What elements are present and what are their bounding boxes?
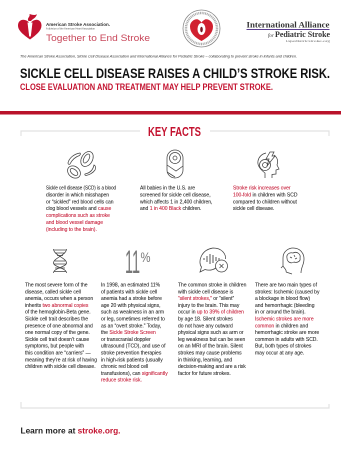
text block: sickle cell anemia: this condition are “carriers” — [25,350,91,356]
text block: stroke risk: sickle cell disease. [233,206,274,212]
text block: 1998 estimate: in high-risk patients (usually [101,357,163,363]
text block: silent strokes: “silent strokes,” or “silent” [178,296,234,302]
text block: newborn screening: and 1 in 400 Black children. [140,206,201,212]
text block: 1998 estimate: the Sickle Stroke Screen [101,330,156,336]
icon: blood cells [65,149,96,181]
text block: sickle cell anemia: presence of one abnormal and [25,323,93,329]
text: Together to End Stroke: Together to End Stroke [46,33,150,44]
text block: sickle cell anemia: symptoms, but people with [25,344,84,350]
stat: 11 percent: 11 [125,244,140,280]
collaboration statement: The American Stroke Association, Sickle Cell Disease Association and International Alliance for Pediatric Stroke – collaborating to prevent stroke in infants and children. [20,54,297,58]
text: division line: A division of the American Heart Association [46,28,96,30]
text block: 1998 estimate: such as weakness in an arm [101,310,164,316]
call to action: learn more: Learn more at stroke.org. [20,426,120,436]
text block: what is SCD: complications such as stroke [46,213,110,219]
text block: 1998 estimate: reduce stroke risk. [101,378,142,384]
icon: speech bubble with x [200,248,228,272]
text block: silent strokes: The common stroke in children [178,282,247,288]
text block: types of strokes: common in children and [255,323,308,329]
text block: silent strokes: physical signs such as arm or [178,330,244,336]
text block: sickle cell anemia: meaning they’re at risk of having [25,357,97,363]
subtitle: CLOSE EVALUATION AND TREATMENT MAY HELP PREVENT STROKE. [20,82,273,93]
text block: silent strokes: by age 18. Silent strokes [178,316,233,322]
stat: 11 percent: % [140,249,150,265]
text block: silent strokes: on an MRI of the brain. Silent [178,344,243,350]
text block: types of strokes: common in adults with SCD. [255,337,318,343]
text block: sickle cell anemia: Sickle cell trait describes the [25,316,88,322]
panel: key facts frame [21,131,329,408]
text block: 1998 estimate: as an “overt stroke.” Today, [101,323,161,329]
text block: silent strokes: injury to the brain. This may [178,303,240,309]
logo: International Alliance for Pediatric Stroke [246,20,331,43]
logo: American Stroke Association [18,14,150,44]
text block: stroke risk: 100-fold in children with SCD [233,192,297,198]
text block: sickle cell anemia: inherits two abnormal copies [25,303,88,309]
icon: head with lightning bolt [258,152,279,178]
text block: 1998 estimate: transfusions), can significantly [101,371,168,377]
text: for Pediatric Stroke: for Pediatric Stroke [268,30,330,39]
text block: what is SCD: (including to the brain). [46,227,97,233]
text block: sickle cell anemia: children with sickle cell disease. [25,364,96,370]
text block: silent strokes: do not have any outward [178,323,233,329]
logo: Sickle Cell Disease Association [183,10,220,47]
text: International Alliance: International Alliance [246,20,330,30]
text block: 1998 estimate: or leg, sometimes referred to [101,316,165,322]
text: American Stroke Association: American Stroke Association. [46,22,110,28]
text block: 1998 estimate: chronic red blood cell [101,364,148,370]
icon: head with brain [281,248,304,274]
icon: DNA helix [54,249,66,273]
text block: types of strokes: a blockage in blood flow) [255,296,310,302]
text block: newborn screening: All babies in the U.S. are [140,186,195,192]
text block: 1998 estimate: or transcranial doppler [101,337,151,343]
text block: types of strokes: But, both types of strokes [255,344,312,350]
text block: 1998 estimate: anemia had a stroke before [101,296,162,302]
text block: sickle cell anemia: Sickle cell trait doesn’t cause [25,337,89,343]
text block: what is SCD: Sickle cell disease (SCD) is a blood [46,186,116,192]
icon: heart and torch [18,14,42,40]
text block: types of strokes: may occur at any age. [255,350,304,356]
text block: sickle cell anemia: disease, called sickle cell [25,289,81,295]
text block: types of strokes: and hemorrhagic (bleeding [255,303,315,309]
text block: sickle cell anemia: one normal copy of the gene. [25,330,90,336]
icon: baby in swaddle [167,150,183,178]
heading: key facts: KEY FACTS [148,125,201,139]
text block: types of strokes: Ischemic strokes are more [255,316,314,322]
text block: silent strokes: leg weakness but can be seen [178,337,245,343]
text: website: iapediatricstroke.org [286,39,331,43]
text block: stroke risk: compared to children without [233,199,298,205]
text block: sickle cell anemia: The most severe form of the [25,282,88,288]
text block: silent strokes: with sickle cell disease is [178,289,234,295]
text block: 1998 estimate: In 1998, an estimated 11% [101,282,161,288]
text block: types of strokes: in or around the brain). [255,310,306,316]
text block: silent strokes: strokes may cause problems [178,350,242,356]
text block: silent strokes: factor for future strokes. [178,371,231,377]
text block: newborn screening: which affects 1 in 2,400 children, [140,199,212,205]
text block: types of strokes: hemorrhagic stroke are more [255,330,319,336]
text block: what is SCD: or “sickled” red blood cells can [46,199,114,205]
text block: 1998 estimate: ultrasound (TCD), and use of [101,344,166,350]
red divider bar [0,111,341,114]
text block: types of strokes: strokes: Ischemic (caused by [255,289,320,295]
text block: what is SCD: and blood vessel damage [46,220,103,226]
text block: stroke risk: Stroke risk increases over [233,186,291,192]
text block: what is SCD: disorder in which misshapen [46,192,109,198]
text block: silent strokes: occur in up to 39% of children [178,310,244,316]
text block: newborn screening: screened for sickle cell disease, [140,192,211,198]
text block: sickle cell anemia: of the hemoglobin-Beta gene. [25,310,91,316]
text block: 1998 estimate: of patients with sickle cell [101,289,157,295]
text block: 1998 estimate: age 20 with physical signs, [101,303,160,309]
text block: what is SCD: clog blood vessels and cause [46,206,111,212]
text block: sickle cell anemia: anemia, occurs when a person [25,296,93,302]
text block: types of strokes: There are two main types of [255,282,318,288]
text block: silent strokes: in thinking, learning, and [178,357,232,363]
text block: silent strokes: decision-making and are a risk [178,364,246,370]
text block: 1998 estimate: stroke prevention therapies [101,350,162,356]
